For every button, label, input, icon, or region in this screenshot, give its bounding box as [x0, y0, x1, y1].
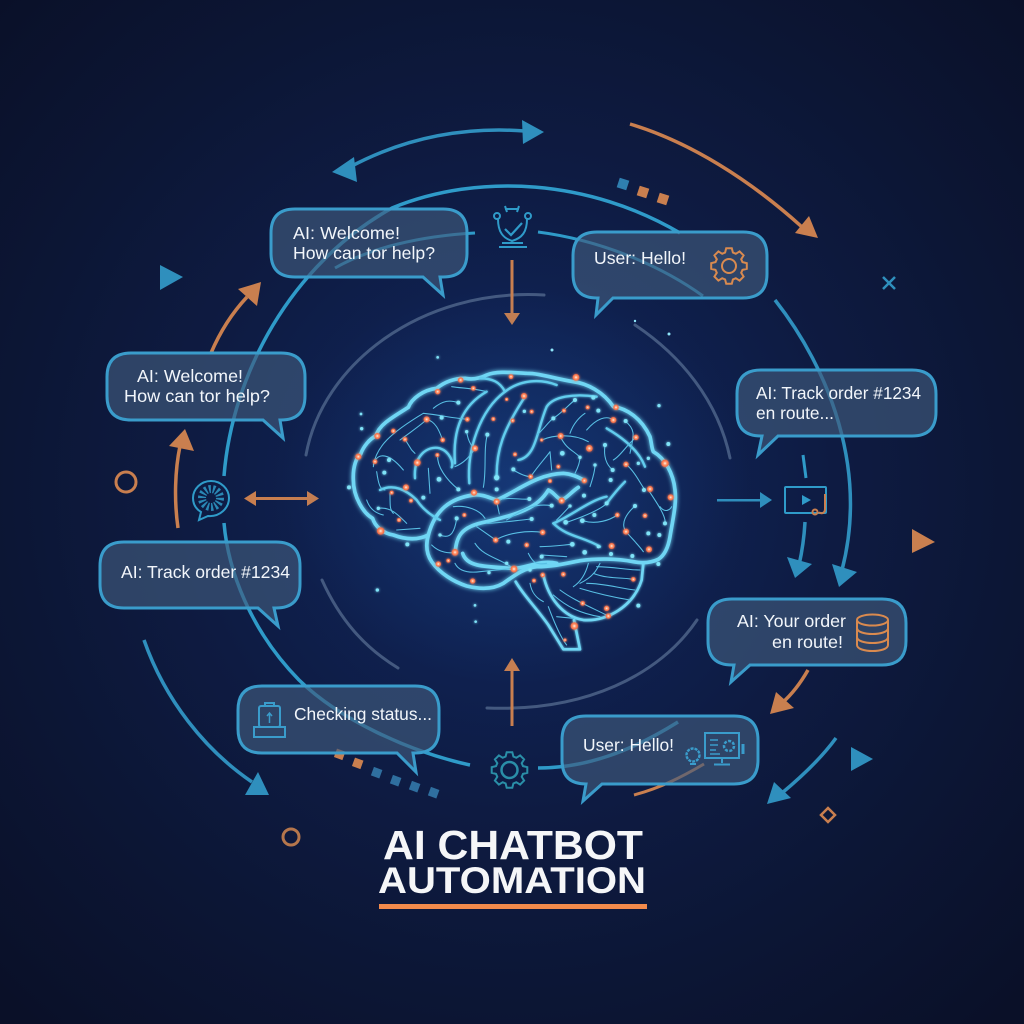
right inner blue arrow	[787, 522, 812, 578]
right blue arrow	[775, 300, 857, 587]
bubble: right track order: en route...	[756, 403, 834, 423]
bubble: left track order	[100, 542, 300, 626]
cerebellum and brain stem	[516, 563, 643, 649]
bubble: right track order: AI: Track order #1234	[756, 383, 921, 403]
left orange arrow lower	[169, 429, 194, 528]
bubble: left welcome: AI: Welcome!	[137, 366, 243, 386]
brain illustration	[280, 283, 747, 683]
bubble: right your order	[708, 599, 906, 682]
orange stub under bubble	[634, 764, 704, 795]
thin sulci	[367, 387, 672, 645]
icon: teal gear	[492, 752, 527, 788]
bubble: bottom right user hello: User: Hello!	[583, 735, 674, 755]
bubble: right track order	[737, 370, 936, 455]
title: AI CHATBOT	[383, 822, 643, 868]
brain outline and lobes	[353, 372, 675, 588]
icon: orange gear	[711, 248, 747, 284]
icon: shield check node	[494, 206, 531, 247]
bubble: right your order: en route!	[772, 632, 843, 652]
bubble: top left welcome: AI: Welcome!	[293, 223, 400, 243]
brain orange nodes	[355, 374, 674, 642]
icon: lock on base	[254, 703, 285, 737]
bubble: left track order: AI: Track order #1234	[121, 562, 290, 582]
title	[378, 822, 646, 901]
brain blue nodes	[347, 356, 670, 623]
decorative shapes	[116, 178, 935, 845]
right small arrow	[717, 492, 772, 508]
left double arrow	[244, 491, 319, 506]
bubble: top left welcome: How can tor help?	[293, 243, 435, 263]
bubble: right your order: AI: Your order	[737, 611, 846, 631]
icon: monitor with gears	[686, 733, 743, 764]
bottom left blue arrow	[144, 640, 269, 795]
bubble: left welcome	[107, 353, 305, 438]
bubble: bottom right user hello	[562, 716, 758, 801]
center arrow up	[504, 658, 520, 726]
brain glow halo	[280, 283, 747, 683]
thick sulci	[380, 378, 645, 547]
bubble: bottom left checking status	[238, 686, 439, 772]
top blue double arrow	[332, 120, 544, 182]
inner grey ring segments	[306, 295, 730, 708]
title underline	[379, 904, 647, 909]
orange arrow lower right	[770, 670, 808, 714]
bubble: top right user hello: User: Hello!	[594, 248, 686, 268]
title: AUTOMATION	[378, 860, 646, 901]
icon: database	[857, 614, 888, 651]
top right orange arrow	[630, 124, 818, 238]
cerebellum folds	[597, 567, 640, 570]
icon: chat brain	[193, 481, 229, 520]
blue orbit ring	[224, 186, 806, 768]
bubble: bottom left checking status: Checking status...	[294, 704, 432, 724]
scattered particles near brain	[550, 320, 670, 352]
bubble: top right user hello	[573, 232, 767, 315]
center arrow down	[504, 260, 520, 325]
bubble: top left welcome	[271, 209, 467, 295]
bubble: left welcome: How can tor help?	[124, 386, 270, 406]
left orange arrow upper	[211, 282, 261, 353]
blue arrow lower right	[767, 738, 836, 804]
icon: video player	[785, 487, 826, 514]
